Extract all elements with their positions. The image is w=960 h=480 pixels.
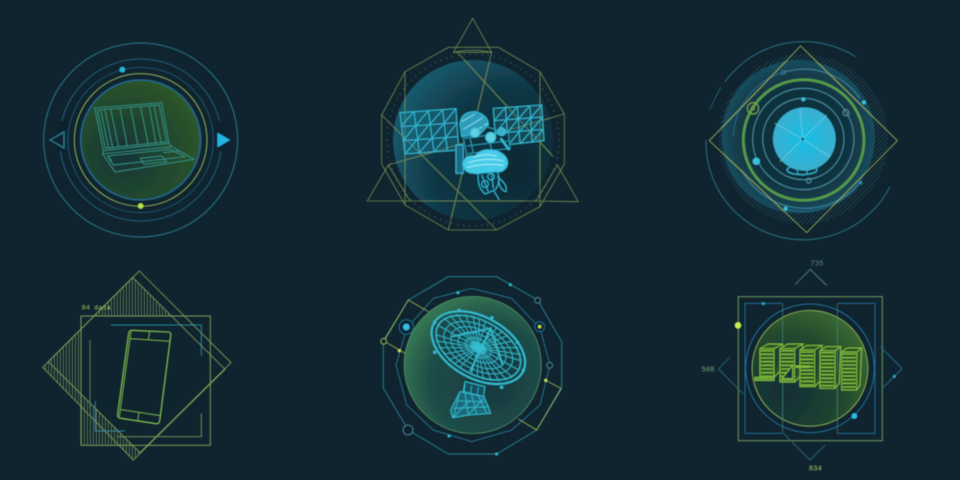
polygon frame	[367, 18, 578, 230]
triangle: top	[453, 18, 492, 52]
orbit dots	[747, 70, 866, 211]
label: 568: 568	[701, 367, 715, 375]
dot: blue	[119, 67, 125, 73]
rack 4	[820, 347, 841, 388]
blue disc	[722, 60, 875, 213]
hatched ring	[718, 54, 888, 224]
icon: laptop wireframe	[95, 103, 194, 172]
panel: servers	[701, 260, 902, 473]
chevrons	[718, 269, 902, 460]
nodes	[381, 283, 553, 456]
blue side brackets	[745, 303, 875, 433]
yellow connectors	[384, 300, 561, 430]
panel: radio telescope	[381, 277, 562, 456]
panel: dish in rings	[706, 42, 897, 240]
inner corner brackets	[90, 325, 201, 437]
sphere	[404, 296, 541, 434]
rim bolts	[433, 309, 525, 389]
triangle: left	[367, 165, 410, 201]
diamond	[709, 46, 897, 233]
pedestal	[463, 382, 485, 397]
satellite body	[456, 112, 510, 200]
hatching	[43, 277, 171, 460]
icon: dish wireframe	[419, 296, 538, 418]
dot: green	[138, 203, 144, 209]
sphere	[81, 80, 201, 200]
rack 3	[795, 345, 822, 387]
rack 1	[755, 344, 783, 380]
tick ring	[387, 54, 559, 226]
triangle: right	[536, 165, 578, 202]
green square frame	[738, 297, 882, 441]
icon: left arrow outlined	[50, 132, 64, 148]
icon: server racks	[755, 344, 862, 390]
icon: phone	[118, 330, 171, 424]
frame square	[81, 316, 210, 445]
right solar wing	[493, 105, 544, 146]
outer polygon	[383, 277, 562, 454]
rack 2	[780, 344, 803, 382]
rotated squares	[43, 271, 231, 460]
dish	[419, 296, 538, 399]
sphere	[393, 60, 553, 220]
blue ring	[746, 304, 874, 433]
yellow orbit ring	[74, 74, 207, 206]
label: 735: 735	[810, 260, 824, 268]
outer arcs	[706, 42, 890, 240]
icon: dish face	[773, 107, 836, 175]
panel: satellite	[367, 18, 578, 230]
orbit rings	[733, 69, 861, 211]
left solar wing	[400, 109, 459, 154]
green ring	[743, 80, 864, 200]
panel: laptop	[44, 43, 238, 237]
inner polygon	[396, 288, 550, 442]
feed struts	[452, 328, 503, 372]
panel: smartphone	[43, 271, 231, 460]
dots	[735, 302, 896, 419]
rack 5	[842, 348, 862, 390]
label: 834: 834	[809, 465, 823, 473]
label: 84 data: 84 data	[82, 303, 111, 311]
outer rings	[44, 43, 238, 237]
icon: right arrow filled	[217, 133, 231, 147]
icon: satellite	[400, 105, 544, 200]
sphere	[752, 310, 868, 426]
